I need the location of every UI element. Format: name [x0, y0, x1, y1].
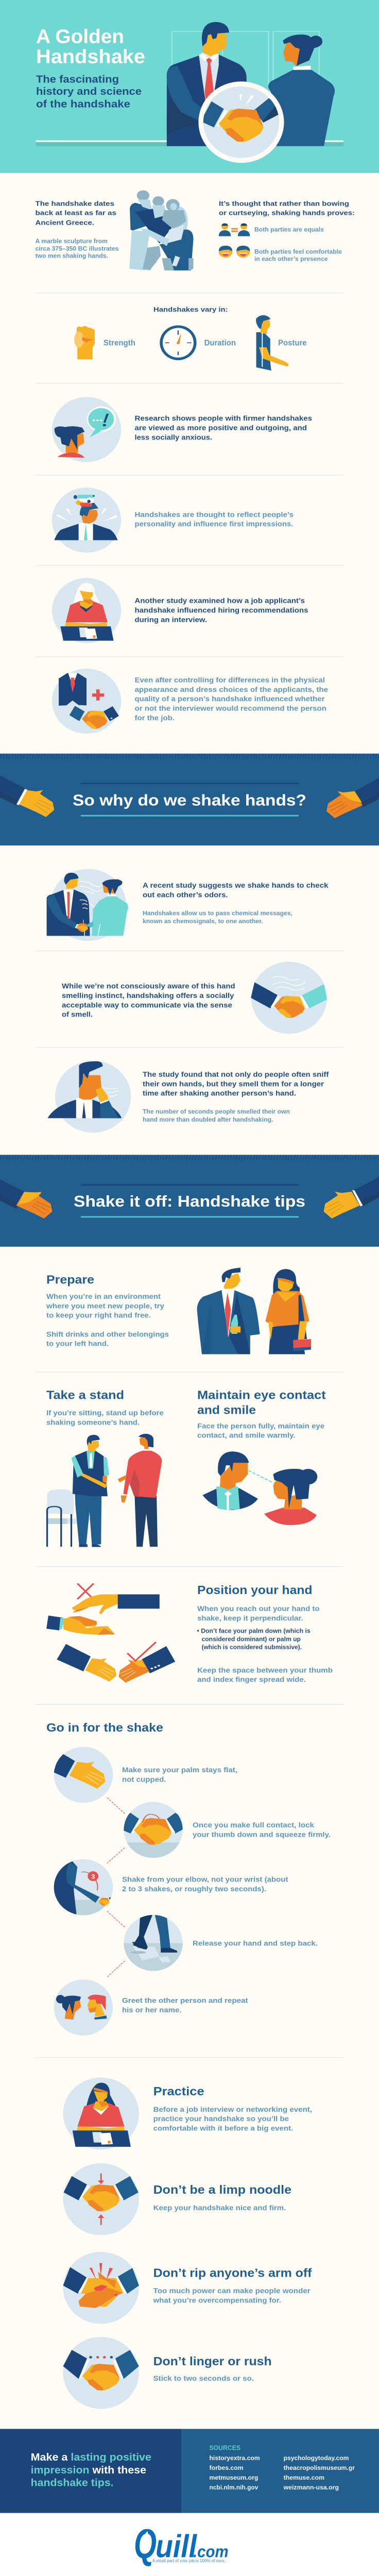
step 3 icon: shake from elbow	[54, 1859, 113, 1916]
step 1 icon: flat palm	[54, 1747, 113, 1803]
call to action: impression with these	[31, 2464, 146, 2476]
text: thumb space: Keep the space between your thumb	[197, 1667, 333, 1674]
dashed connector	[107, 1961, 125, 1977]
text: comfortable in each other's presence: in each other’s presence	[254, 256, 328, 262]
text: job applicant study: Another study examined how a job applicant’s	[135, 597, 305, 605]
banner: so why do we shake hands	[0, 754, 379, 845]
tip: linger or rush	[63, 2337, 272, 2409]
heading: maintain eye contact	[197, 1388, 326, 1416]
call to action: handshake tips.	[31, 2477, 114, 2488]
icon: reaching hands	[0, 1177, 379, 1218]
text: check odors: A recent study suggests we shake hands to check	[143, 882, 329, 890]
icon: marble sculpture	[129, 190, 194, 270]
icon: suit plus handshake	[52, 669, 121, 734]
text: practice handshake: comfortable with it before a big event.	[153, 2125, 293, 2132]
tip: go in for the shake	[46, 1721, 331, 2036]
tip: limp noodle	[63, 2163, 291, 2235]
call to action	[31, 2452, 151, 2488]
tip: maintain eye contact	[197, 1388, 326, 1525]
heading: handshakes vary in: Handshakes vary in:	[153, 306, 228, 313]
icon: man with bottle and woman with bag	[197, 1268, 311, 1354]
text: two seconds: Stick to two seconds or so.	[153, 2375, 254, 2383]
text: palm bullet: • Don’t face your palm down (which is	[197, 1628, 311, 1634]
label: strength: Strength	[104, 338, 135, 347]
sources list: metmuseum.org	[209, 2474, 258, 2481]
text: chemosignals	[143, 910, 292, 925]
icon: smiling faces	[219, 246, 250, 258]
text: keep perpendicular: When you reach out your hand to	[197, 1605, 320, 1613]
step 5 text	[122, 1997, 248, 2014]
banner heading: Shake it off: Handshake tips	[74, 1193, 305, 1210]
icon: firm handshake arrows	[63, 2163, 139, 2235]
text: seconds doubled: The number of seconds people smelled their own	[143, 1108, 290, 1115]
icon: handshake with dots	[63, 2337, 139, 2409]
text: palm bullet: considered dominant) or palm up	[202, 1636, 301, 1642]
text: personality and first impressions: Handshakes are thought to reflect people’s	[135, 511, 294, 519]
icon: fist	[74, 326, 95, 360]
text: history intro: Ancient Greece.	[36, 219, 94, 226]
text: socially acceptable smelling: of smell.	[62, 1011, 93, 1019]
sources list: themuse.com	[284, 2474, 324, 2481]
icon: two men standing with chair	[47, 1434, 162, 1547]
text: keep right hand free: When you’re in an environment	[46, 1293, 161, 1301]
sources list	[209, 2454, 355, 2491]
step 3 text: 2 to 3 shakes, or roughly two seconds).	[122, 1885, 266, 1893]
heading: take a stand: Take a stand	[46, 1388, 124, 1401]
text: research firm handshakes: Research shows people with firmer handshakes	[135, 415, 312, 423]
text: both parties are equals: Both parties are equals	[254, 226, 324, 233]
heading: maintain eye contact: and smile	[197, 1403, 256, 1416]
text: socially acceptable smelling: smelling instinct, handshaking offers a socially	[62, 992, 234, 1000]
text: job applicant study: during an interview.	[135, 616, 207, 624]
text: socially acceptable smelling: While we’re not consciously aware of this hand	[62, 982, 235, 991]
step 4 text: Release your hand and step back.	[193, 1940, 318, 1948]
text: too much power: Too much power can make people wonder	[153, 2287, 311, 2295]
icon: man with thoughts	[52, 487, 121, 553]
call to action: Make a lasting positive	[31, 2452, 151, 2463]
text: stand up: shaking someone’s hand.	[46, 1419, 140, 1427]
icon: handshake with scent waves	[251, 962, 327, 1034]
text: firm: Keep your handshake nice and firm.	[153, 2204, 286, 2212]
sources list: weizmann-usa.org	[283, 2484, 339, 2491]
heading: limp noodle: Don’t be a limp noodle	[153, 2183, 291, 2196]
step 4 icon: stepping back	[124, 1914, 183, 1971]
text: chemosignals: known as chemosignals, to one another.	[143, 918, 263, 925]
subtitle	[36, 74, 142, 110]
text: sniff own hands: their own hands, but they smell them for a longer	[143, 1080, 324, 1088]
heading: maintain eye contact: Maintain eye contact	[197, 1388, 326, 1401]
step 2 text	[193, 1821, 331, 1839]
step 2 text: your thumb down and squeeze firmly.	[193, 1831, 331, 1839]
step 1 text: Make sure your palm stays flat,	[122, 1767, 237, 1774]
logo: Quill.com: uill	[156, 2528, 197, 2564]
text: research firm handshakes: less socially anxious.	[135, 434, 212, 442]
logo: Quill.com: A small part of your job is 100% of ours.	[152, 2558, 226, 2563]
text: handshake quality: or not the interviewer would recommend the person	[135, 705, 326, 713]
text: palm bullet	[197, 1628, 311, 1651]
icon: crushing handshake	[63, 2252, 139, 2324]
tip: position your hand	[46, 1583, 333, 1684]
text: handshake quality: appearance and dress choices of the applicants, the	[135, 686, 328, 694]
text: too much power: what you’re overcompensating for.	[153, 2297, 281, 2304]
text: comfortable in each other's presence: Both parties feel comfortable	[254, 248, 342, 255]
step 5 icon: two faces greeting	[54, 1979, 113, 2036]
text: handshake quality: Even after controlling for differences in the physical	[135, 676, 325, 684]
logo: Quill.com	[134, 2520, 229, 2567]
subtitle: history and science	[36, 86, 142, 97]
subtitle: of the handshake	[36, 98, 130, 110]
tip: take a stand	[46, 1388, 164, 1547]
text: keep right hand free: to your left hand.	[46, 1340, 109, 1348]
icon: wrong and right hand positions	[46, 1583, 175, 1683]
logo: Quill.com: Q	[134, 2520, 157, 2567]
icon: man smelling hand	[47, 1061, 131, 1133]
dashed connector	[107, 1911, 125, 1927]
step 3 count: 3	[91, 1873, 95, 1880]
text: history intro	[36, 200, 116, 226]
text: practice handshake	[153, 2106, 312, 2132]
heading: practice: Practice	[153, 2085, 204, 2098]
icon: woman at desk	[63, 2077, 139, 2149]
text: stand up	[46, 1409, 164, 1427]
step 5 text: Greet the other person and repeat	[122, 1997, 248, 2005]
text: smile warmly: Face the person fully, maintain eye	[197, 1422, 324, 1430]
icon: reaching hands	[0, 775, 379, 818]
text: practice handshake: practice your handshake so you’ll be	[153, 2115, 289, 2123]
text: keep perpendicular	[197, 1605, 320, 1622]
icon: woman with speech bubble	[52, 397, 121, 462]
heading: linger or rush: Don’t linger or rush	[153, 2355, 272, 2368]
text: what handshakes prove	[219, 200, 355, 216]
text: socially acceptable smelling: acceptable way to communicate via the sense	[62, 1002, 232, 1009]
step 3 text: Shake from your elbow, not your wrist (about	[122, 1876, 288, 1884]
heading: go in for the shake: Go in for the shake	[46, 1721, 163, 1734]
text: stand up: If you’re sitting, stand up before	[46, 1409, 164, 1417]
text: socially acceptable smelling	[62, 982, 235, 1019]
label: posture: Posture	[278, 338, 307, 347]
text: handshake quality: for the job.	[135, 714, 175, 722]
text: keep perpendicular: shake, keep it perpendicular.	[197, 1615, 303, 1622]
text: chemosignals: Handshakes allow us to pass chemical messages,	[143, 910, 292, 917]
text: marble sculpture note: circa 375–350 BC illustrates	[36, 245, 119, 252]
dashed connector	[107, 1798, 125, 1814]
step 1 text: not cupped.	[122, 1776, 166, 1784]
step 3 text	[122, 1876, 288, 1893]
text: smile warmly	[197, 1422, 324, 1440]
icon: two people sniffing	[47, 869, 128, 941]
banner heading: So why do we shake hands?	[73, 791, 306, 809]
tip: rip arm off	[63, 2252, 312, 2324]
hero panel	[0, 0, 379, 173]
text: keep right hand free: where you meet new people, try	[46, 1302, 165, 1310]
text: job applicant study	[135, 597, 308, 624]
text: check odors: out each other’s odors.	[143, 891, 228, 899]
step 2 icon: locked thumb	[124, 1802, 183, 1858]
icon: posture	[256, 315, 289, 370]
text: keep right hand free	[46, 1293, 169, 1348]
text: sniff own hands: The study found that not only do people often sniff	[143, 1071, 329, 1079]
step 2 text: Once you make full contact, lock	[193, 1821, 315, 1829]
icon: man and woman making eye contact	[202, 1451, 317, 1525]
sources list: forbes.com	[209, 2464, 244, 2471]
text: personality and first impressions	[135, 511, 294, 529]
step 5 text: his or her name.	[122, 2006, 182, 2014]
text: history intro: back at least as far as	[36, 209, 116, 216]
title	[36, 26, 145, 67]
subtitle: The fascinating	[36, 74, 119, 85]
text: thumb space: and index finger spread wide.	[197, 1676, 306, 1684]
text: keep right hand free: Shift drinks and other belongings	[46, 1331, 169, 1338]
text: personality and first impressions: personality and influence first impressions.	[135, 520, 293, 529]
banner: handshake tips	[0, 1155, 379, 1247]
text: seconds doubled: hand more than doubled after handshaking.	[143, 1116, 273, 1123]
label: duration: Duration	[204, 338, 236, 347]
title: Handshake	[36, 46, 145, 67]
text: job applicant study: handshake influenced hiring recommendations	[135, 606, 308, 615]
tip: prepare	[46, 1268, 311, 1354]
logo: Quill.com: .com	[193, 2543, 229, 2561]
text: practice handshake: Before a job interview or networking event,	[153, 2106, 312, 2114]
text: comfortable in each other's presence	[254, 248, 342, 262]
sources list: theacropolismuseum.gr	[284, 2464, 355, 2471]
icon: equal people	[219, 224, 250, 236]
icon: job applicant at desk	[52, 578, 121, 643]
text: handshake quality: quality of a person’s handshake influenced whether	[135, 696, 325, 703]
sources list: ncbi.nlm.nih.gov	[209, 2484, 258, 2491]
footer panel	[0, 2429, 379, 2513]
text: marble sculpture note: two men shaking hands.	[36, 252, 108, 259]
text: marble sculpture note	[36, 238, 119, 259]
tip: practice	[63, 2077, 312, 2149]
text: marble sculpture note: A marble sculpture from	[36, 238, 108, 245]
heading: position your hand: Position your hand	[197, 1584, 313, 1597]
text: seconds doubled	[143, 1108, 290, 1123]
text: what handshakes prove: or curtseying, shaking hands proves:	[219, 209, 355, 216]
text: sniff own hands: time after shaking another person’s hand.	[143, 1090, 296, 1098]
hero illustration: two people shaking hands	[36, 22, 343, 163]
sources heading: SOURCES	[209, 2444, 240, 2451]
text: palm bullet: (which is considered submissive).	[202, 1643, 302, 1651]
text: too much power	[153, 2287, 311, 2304]
text: keep right hand free: to keep your right hand free.	[46, 1312, 151, 1320]
step 1 text	[122, 1767, 237, 1784]
text: thumb space	[197, 1667, 333, 1684]
text: history intro: The handshake dates	[36, 200, 114, 207]
heading: rip arm off: Don’t rip anyone’s arm off	[153, 2266, 312, 2279]
text: smile warmly: contact, and smile warmly.	[197, 1432, 296, 1440]
text: handshake quality	[135, 676, 328, 722]
text: research firm handshakes	[135, 415, 312, 442]
text: what handshakes prove: It’s thought that rather than bowing	[219, 200, 349, 207]
sources list: psychologytoday.com	[284, 2454, 349, 2462]
title: A Golden	[36, 26, 124, 47]
heading: prepare: Prepare	[46, 1273, 94, 1286]
sources list: historyextra.com	[209, 2454, 260, 2462]
text: check odors	[143, 882, 329, 899]
icon: clock	[160, 325, 197, 360]
text: research firm handshakes: are viewed as more positive and outgoing, and	[135, 424, 307, 432]
text: sniff own hands	[143, 1071, 329, 1098]
dashed connector	[107, 1848, 125, 1863]
